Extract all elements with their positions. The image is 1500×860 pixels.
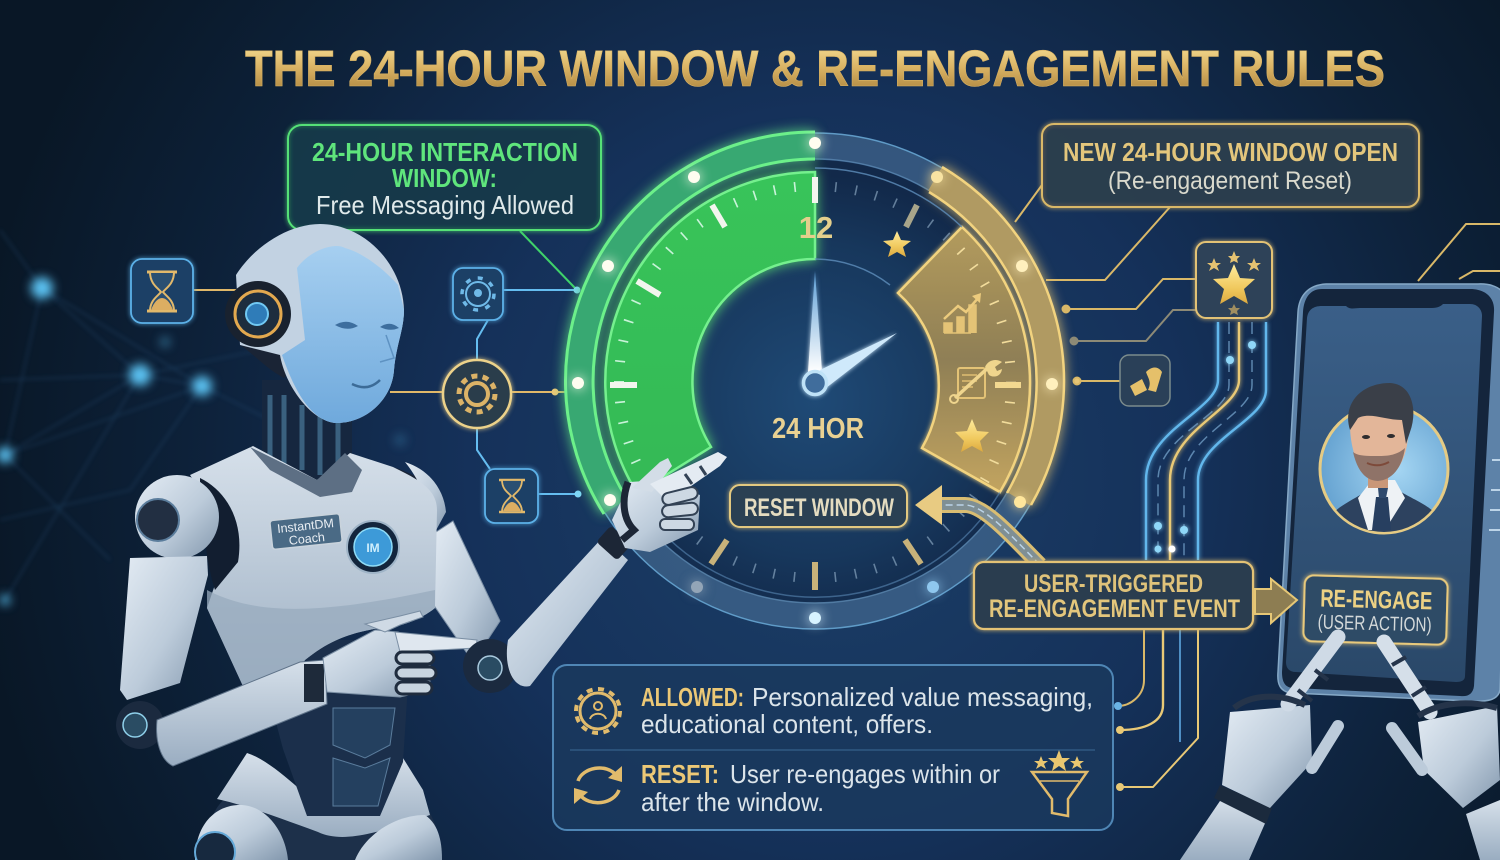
robot left shoulder — [135, 475, 239, 590]
icon: star in gold sector — [955, 419, 989, 452]
robot right upper arm — [393, 462, 500, 662]
re-engage button: (USER ACTION) — [1317, 612, 1432, 636]
text: reset label: RESET: — [641, 759, 719, 789]
robot chest pointing hand — [304, 611, 477, 702]
dial arcs — [660, 168, 1000, 597]
label: 24 HOR: 24 HOR — [772, 413, 864, 445]
minute ticks — [619, 186, 1011, 578]
name badge — [270, 513, 342, 550]
side panel stripes — [1489, 460, 1500, 530]
text: reset body: User re-engages within or — [730, 759, 1000, 789]
circuit traces — [1114, 322, 1266, 791]
icon box: hand tool — [1120, 355, 1170, 406]
callout: 24-hour interaction window: WINDOW: — [392, 163, 497, 193]
chest emblem — [347, 521, 399, 573]
robot hand right on phone — [1384, 642, 1500, 860]
user-triggered event box: USER-TRIGGERED — [1024, 570, 1203, 598]
phone — [1278, 284, 1500, 701]
robot torso — [190, 446, 437, 708]
text: allowed label: ALLOWED: — [641, 682, 744, 712]
robot chest collar — [250, 447, 362, 497]
text: allowed body line 2: educational content, offers. — [641, 709, 933, 739]
outer ring track — [580, 146, 1050, 616]
icon: gear with person — [576, 689, 620, 733]
callout: new 24-hour window open: NEW 24-HOUR WINDOW OPEN — [1063, 137, 1398, 167]
clock gauge — [566, 132, 1064, 629]
text: reset body line 2: after the window. — [641, 787, 824, 817]
re-engage button: RE-ENGAGE — [1320, 585, 1433, 615]
clock hands — [804, 271, 897, 394]
icon: funnel with stars — [1032, 750, 1087, 816]
callout: 24-hour interaction window: 24-HOUR INTERACTION — [312, 137, 578, 167]
clock dial disc — [593, 160, 1037, 604]
callout: 24-hour interaction window: Free Messaging Allowed — [316, 190, 574, 220]
icon box: hourglass lower — [485, 469, 538, 523]
icon box: stars — [1196, 242, 1272, 318]
green outer ring arc — [566, 132, 815, 514]
icon: gear circle — [443, 360, 511, 428]
robot left forearm — [157, 660, 327, 766]
avatar portrait — [1320, 383, 1450, 540]
title: THE 24-HOUR WINDOW & RE-ENGAGEMENT RULES — [245, 40, 1385, 97]
robot right forearm — [507, 537, 628, 687]
phone body — [1278, 284, 1500, 701]
robot pointing hand — [596, 452, 727, 561]
reset window label — [730, 485, 907, 527]
star on dial — [883, 231, 911, 257]
decorative network on the left — [0, 230, 406, 605]
phone screen — [1286, 304, 1482, 682]
gold sector: reset zone — [898, 227, 1030, 492]
robot neck — [262, 380, 352, 485]
connector lines: gold ring to right icons — [1015, 185, 1500, 384]
re-engage button — [1303, 575, 1448, 645]
robot hand left on phone — [1180, 637, 1338, 860]
icon: growth chart — [944, 293, 981, 333]
reset window label: RESET WINDOW — [744, 494, 894, 522]
robot abdomen — [270, 640, 407, 816]
callout: new 24-hour window open — [1042, 124, 1419, 207]
robot lower body: hips — [195, 753, 442, 860]
label: 12: 12 — [799, 210, 833, 245]
connector lines: left icons — [192, 231, 582, 498]
icon: document and wrench — [950, 360, 1002, 403]
ring lights — [572, 137, 1058, 624]
robot left elbow — [116, 701, 164, 749]
robot head — [225, 224, 404, 423]
callout: new 24-hour window open: (Re-engagement Reset) — [1108, 167, 1352, 195]
green sector: 24-hour window — [605, 172, 815, 493]
user-triggered event box: RE-ENGAGEMENT EVENT — [989, 595, 1240, 623]
name badge: Coach — [288, 530, 326, 548]
arrow: event to re-engage — [1255, 579, 1297, 623]
icon box: gear small — [453, 268, 503, 320]
traces to info panel — [1114, 630, 1198, 791]
robot left upper arm — [120, 556, 208, 700]
arrow: event to reset window — [915, 485, 1040, 565]
robot coach — [116, 224, 727, 860]
callout: 24-hour interaction window — [288, 125, 601, 230]
icon box: hourglass left — [131, 259, 193, 323]
chest emblem: IM — [366, 541, 380, 555]
user-triggered event box — [974, 562, 1253, 629]
name badge: InstantDM — [276, 516, 335, 536]
icon: refresh arrows — [574, 766, 622, 804]
hour ticks — [610, 177, 1021, 590]
chest lower shading — [207, 590, 435, 708]
text: allowed body: Personalized value messaging, — [752, 682, 1093, 712]
info panel — [553, 665, 1113, 830]
gold outer ring arc — [929, 167, 1064, 505]
robot right elbow — [463, 639, 517, 693]
